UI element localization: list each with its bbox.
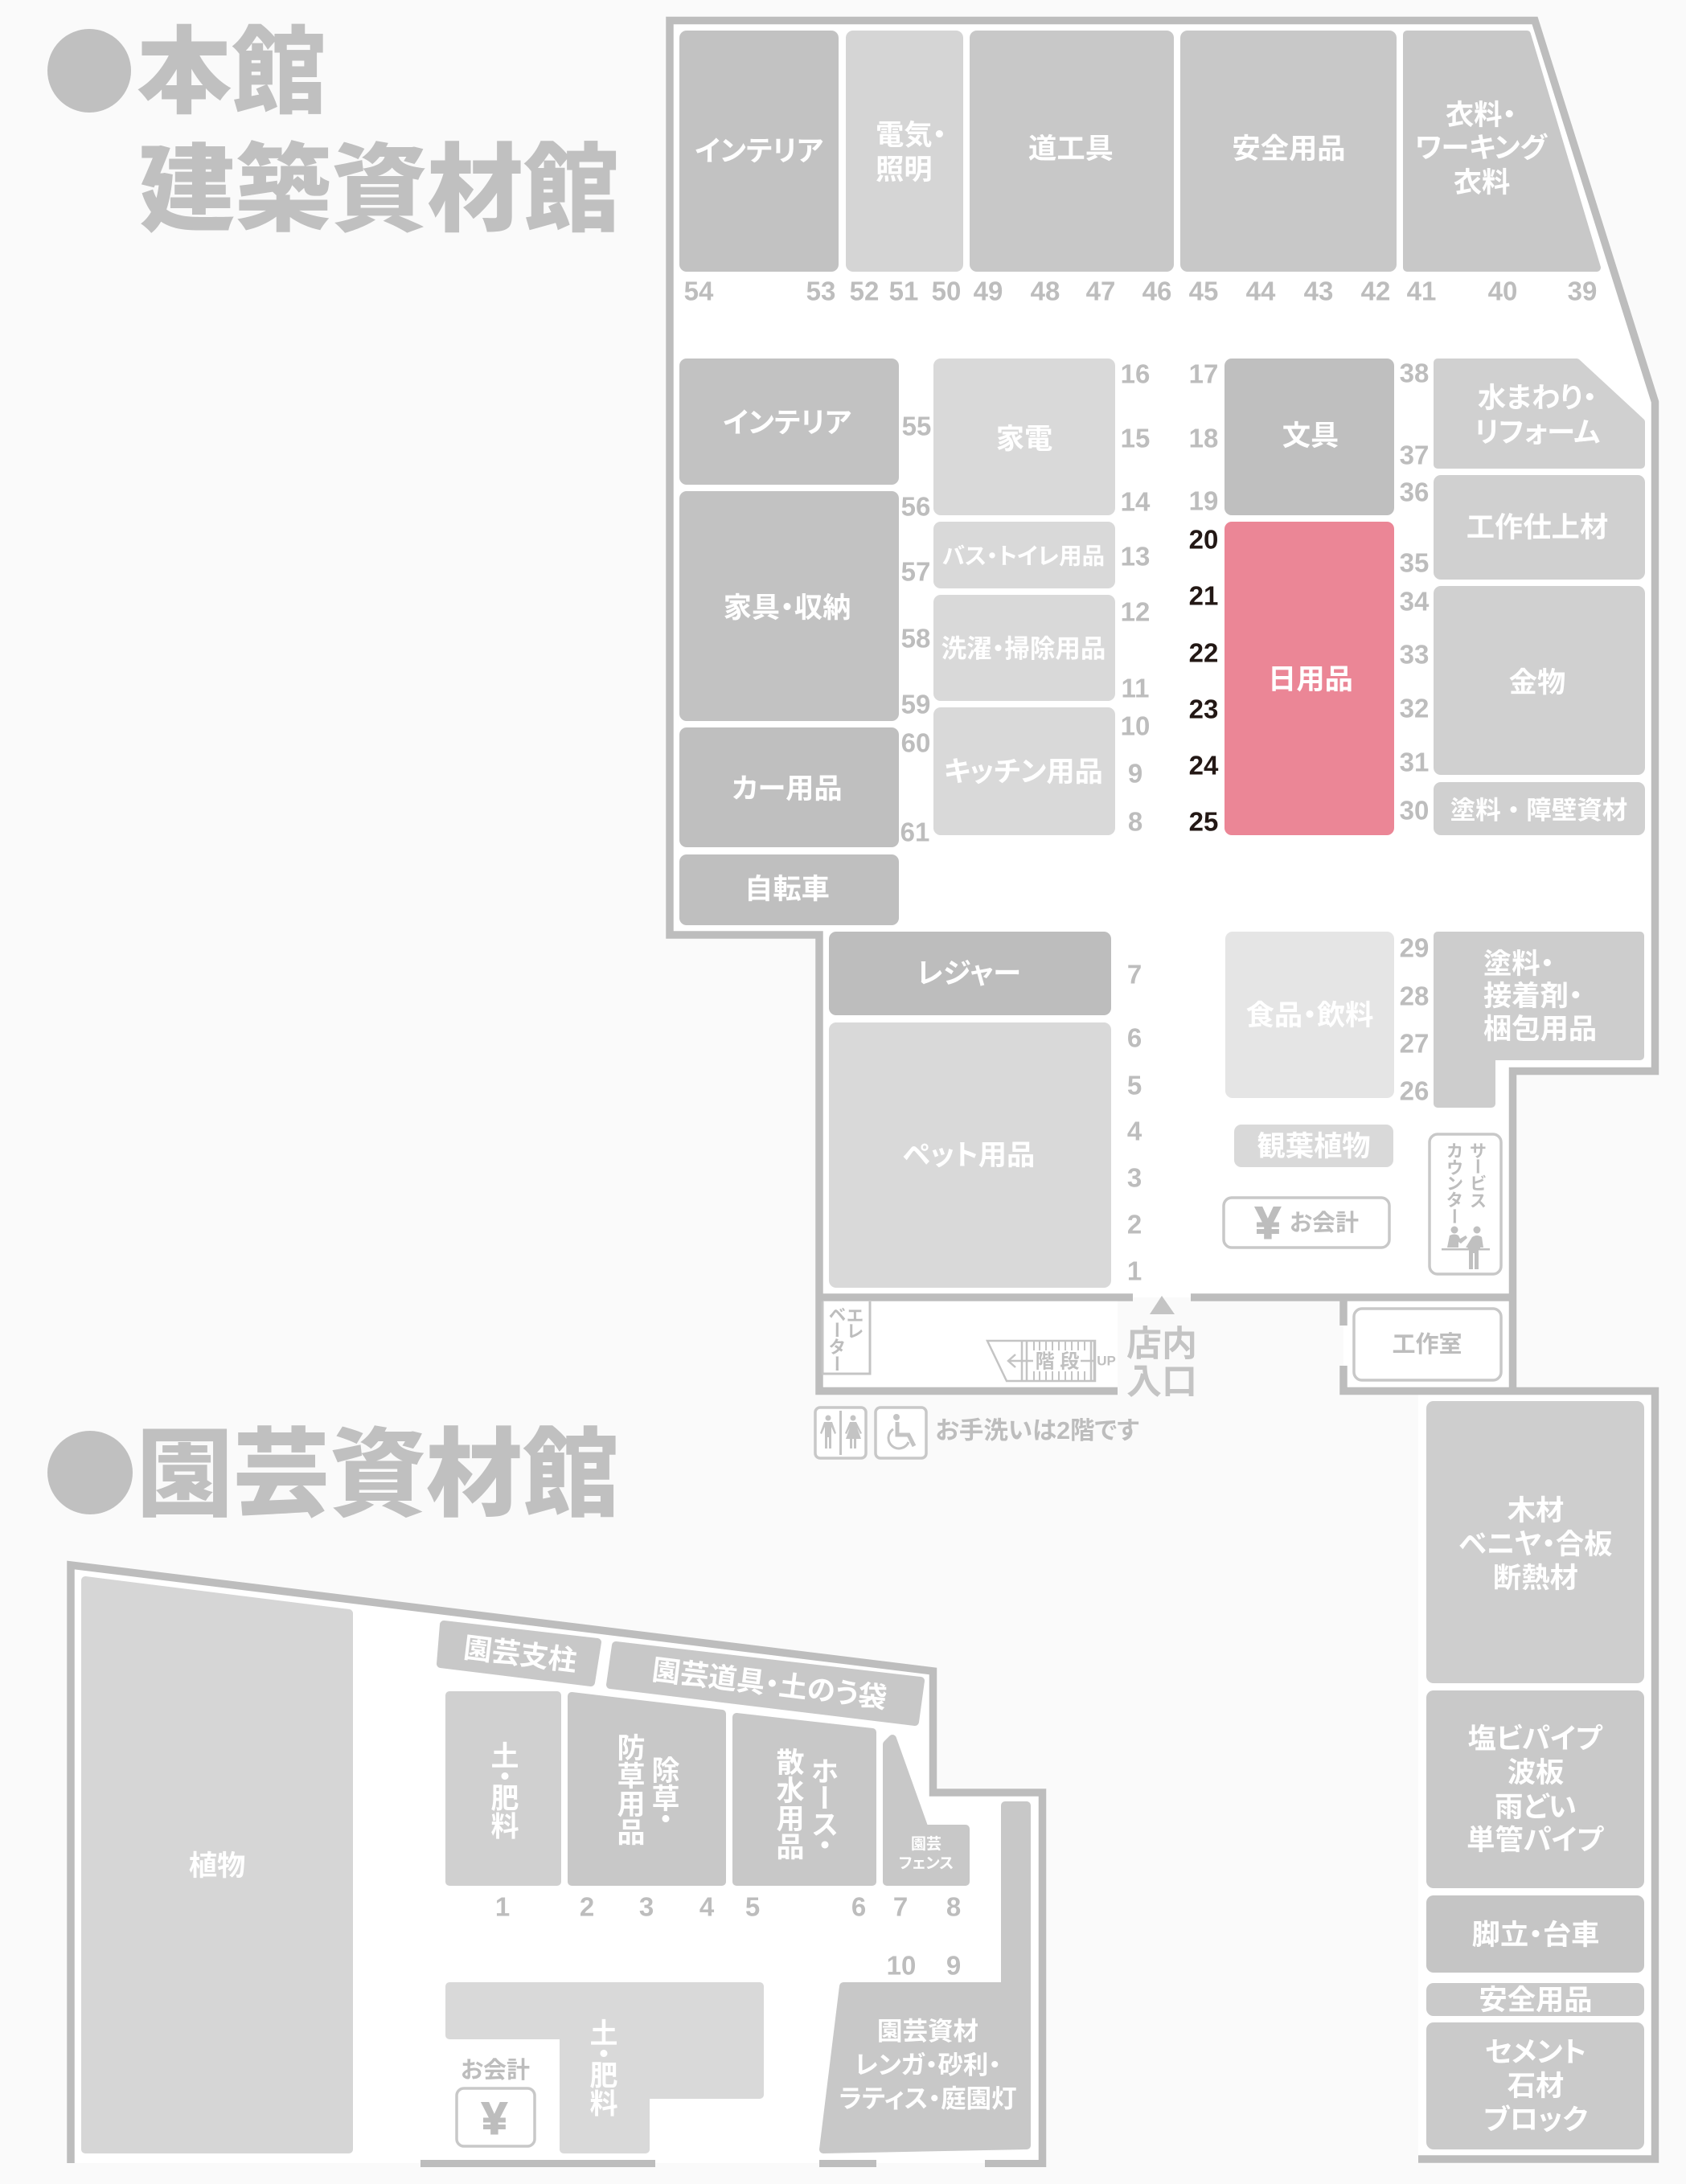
section: 洗濯・掃除用品: [933, 595, 1115, 701]
section: 電気・照明: 電気・: [876, 120, 946, 151]
section: インテリア top: [679, 31, 839, 272]
aisle numbers: centre columns: 17: [1189, 359, 1218, 389]
section: 除草・防草用品: 防草用品: [613, 1733, 645, 1846]
section: 塩ビパイプ: [1426, 1690, 1644, 1888]
aisle numbers: top row: 53: [806, 277, 835, 305]
room: 工作室: 工作室: [1392, 1331, 1462, 1358]
section: 家電: 家電: [996, 424, 1052, 455]
aisle numbers: top row: 47: [1086, 277, 1115, 305]
section: 塩ビパイプ: 塩ビパイプ: [1468, 1723, 1603, 1755]
aisle numbers: centre columns: 37: [1400, 440, 1429, 469]
aisle numbers: centre columns: 59: [901, 690, 930, 719]
aisle numbers: centre columns: 61: [900, 817, 929, 847]
section: 工作仕上材: [1434, 475, 1645, 580]
aisle numbers: highlighted 20-25: 23: [1189, 695, 1218, 723]
aisle numbers: centre columns: 11: [1122, 674, 1149, 703]
garden register: ¥: [482, 2093, 507, 2143]
aisle numbers: centre columns: 15: [1121, 423, 1150, 453]
icon: accessible restroom: [876, 1408, 926, 1458]
aisle numbers: highlighted 20-25: 20: [1189, 524, 1218, 555]
section: レジャー: [829, 932, 1111, 1015]
section: 水まわり・リフォーム: リフォーム: [1475, 417, 1600, 449]
service counter: サービス: [1467, 1142, 1487, 1209]
section: セメント: 石材: [1508, 2071, 1564, 2102]
entrance: [1126, 1296, 1197, 1402]
section: レジャー: レジャー: [917, 958, 1021, 990]
section: 金物: [1434, 586, 1645, 775]
section: 電気・照明: 照明: [876, 154, 933, 186]
section: 園芸道具・土のう袋: 園芸道具・土のう袋: [650, 1654, 888, 1715]
section: インテリア: インテリア: [723, 408, 851, 439]
aisle numbers: top row: 54: [684, 277, 714, 305]
aisle numbers: top row: [684, 277, 1597, 305]
section: 園芸資材: ラティス・庭園灯: [839, 2084, 1017, 2112]
section: 塩ビパイプ: 波板: [1508, 1757, 1564, 1789]
aisle numbers: top row: 44: [1246, 277, 1276, 305]
heading: main building: 建築資材館: [139, 137, 619, 244]
aisle numbers: garden: 2: [580, 1892, 594, 1921]
section: 園芸道具・土のう袋: [610, 1645, 921, 1722]
aisle numbers: top row: 41: [1407, 277, 1436, 305]
section: 塩ビパイプ: 雨どい: [1495, 1792, 1577, 1823]
floor plan: garden building: [71, 1565, 1046, 2167]
register: お会計: ¥: [1255, 1198, 1281, 1248]
aisle numbers: centre columns: 9: [1128, 759, 1142, 788]
aisle numbers: garden: [495, 1892, 961, 1981]
section: 食品・飲料: 食品・飲料: [1246, 1000, 1373, 1031]
icon: counter staff and customer: [1442, 1227, 1490, 1269]
garden register: [457, 2057, 535, 2146]
section: カー用品: [679, 727, 899, 847]
aisle numbers: centre columns: 38: [1400, 359, 1429, 387]
stairs: 階 段: [1036, 1350, 1079, 1373]
section: 衣料・ワーキング衣料: [1407, 35, 1597, 268]
aisle numbers: centre columns: 57: [901, 556, 930, 587]
section: バス・トイレ用品: バス・トイレ用品: [942, 543, 1105, 569]
elevator: [822, 1301, 870, 1374]
aisle numbers: top row: 42: [1361, 277, 1390, 305]
section: 安全用品 lower: 安全用品: [1479, 1985, 1593, 2016]
section: 家電: [933, 359, 1115, 515]
service counter: カウンター: [1444, 1142, 1463, 1224]
register: お会計: [1224, 1198, 1389, 1248]
aisle numbers: centre columns: 36: [1400, 477, 1429, 506]
section: 土・肥料: 土・肥料: [487, 1741, 519, 1839]
aisle numbers: centre columns: 8: [1128, 807, 1142, 836]
section: キッチン用品: キッチン用品: [944, 756, 1103, 788]
section: 衣料・ワーキング衣料: 衣料・: [1446, 100, 1516, 131]
section: 文具: 文具: [1282, 420, 1339, 452]
section: 自転車: [679, 854, 899, 925]
garden register: お会計: [461, 2057, 530, 2084]
section: 塗料・障壁資材: 塗料・障壁資材: [1450, 796, 1627, 825]
aisle numbers: garden: 9: [946, 1950, 961, 1981]
aisle numbers: centre columns: 32: [1400, 693, 1429, 723]
section: 脚立・台車: [1426, 1895, 1644, 1973]
aisle numbers: centre columns: 12: [1121, 596, 1150, 627]
section: 土・肥料 lower: 土・肥料: [585, 2018, 617, 2117]
floor plan: main building: [670, 20, 1655, 2159]
bottom wall segments: [420, 2160, 1046, 2167]
aisle numbers: centre columns: 34: [1400, 587, 1430, 616]
section: 塗料・接着剤・梱包用品: 梱包用品: [1483, 1014, 1597, 1045]
section: 電気・照明: [846, 31, 963, 272]
aisle numbers: top row: 40: [1488, 277, 1517, 305]
section: 自転車: 自転車: [745, 874, 830, 905]
section: 日用品 (highlighted): [1225, 522, 1394, 835]
section: 観葉植物: [1234, 1125, 1393, 1167]
section: 園芸フェンス: [887, 1739, 966, 1882]
section: 植物: [85, 1580, 349, 2149]
elevator: ベーター: [827, 1307, 846, 1372]
section: 観葉植物: 観葉植物: [1257, 1131, 1371, 1162]
section: 除草・防草用品: [572, 1696, 722, 1882]
section: 水まわり・リフォーム: 水まわり・: [1478, 383, 1597, 414]
entrance: 店内: [1126, 1325, 1197, 1363]
aisle numbers: garden: 1: [495, 1892, 510, 1921]
section: セメント: ブロック: [1483, 2104, 1588, 2136]
section: 塗料・接着剤・梱包用品: 接着剤・: [1483, 981, 1583, 1012]
section: ペット用品: [829, 1022, 1111, 1288]
section: 木材: ベニヤ・合板: [1458, 1529, 1613, 1560]
entrance: 入口: [1126, 1362, 1197, 1402]
aisle numbers: centre columns: [900, 359, 1430, 1286]
section: ペット用品: ペット用品: [903, 1140, 1035, 1171]
section: 文具: [1225, 359, 1394, 515]
section: 安全用品 lower: [1426, 1983, 1644, 2016]
aisle numbers: centre columns: 7: [1127, 960, 1142, 989]
section: 脚立・台車: 脚立・台車: [1472, 1920, 1599, 1951]
aisle numbers: centre columns: 19: [1189, 486, 1218, 516]
section: 安全用品: [1180, 31, 1397, 272]
service counter: [1430, 1134, 1501, 1274]
heading: main building: 本館: [137, 20, 326, 126]
aisle numbers: garden: 7: [893, 1892, 908, 1921]
section: 食品・飲料: [1225, 932, 1394, 1098]
section: 木材: 木材: [1508, 1495, 1564, 1526]
section: 安全用品: 安全用品: [1232, 133, 1346, 165]
section: 園芸フェンス: 園芸: [911, 1835, 941, 1853]
aisle numbers: garden: 4: [699, 1892, 715, 1921]
aisle numbers: garden: 3: [639, 1892, 654, 1921]
aisle numbers: centre columns: 28: [1400, 981, 1429, 1011]
aisle numbers: centre columns: 60: [901, 728, 930, 757]
section: 除草・防草用品: 除草・: [648, 1756, 679, 1826]
section: ホース・散水用品: ホース・: [807, 1758, 838, 1852]
room: 工作室: [1354, 1309, 1501, 1380]
aisle numbers: top row: 48: [1031, 277, 1060, 305]
note: restrooms on 2F: お手洗いは2階です: [935, 1417, 1139, 1444]
section: 衣料・ワーキング衣料: ワーキング: [1415, 133, 1548, 164]
section: 木材: 断熱材: [1493, 1563, 1578, 1594]
aisle numbers: centre columns: 2: [1127, 1209, 1142, 1240]
section: 道工具: 道工具: [1028, 133, 1114, 165]
aisle numbers: highlighted 20-25: [1189, 524, 1219, 836]
stairs: UP: [1097, 1354, 1116, 1368]
section: ホース・散水用品: [736, 1717, 872, 1882]
section: ホース・散水用品: 散水用品: [772, 1748, 804, 1860]
aisle numbers: top row: 50: [932, 277, 961, 305]
section: 洗濯・掃除用品: 洗濯・掃除用品: [941, 633, 1106, 662]
aisle numbers: garden: 5: [745, 1892, 760, 1921]
aisle numbers: top row: 46: [1142, 277, 1171, 305]
section: 木材: [1426, 1401, 1644, 1683]
section: セメント: セメント: [1485, 2037, 1586, 2068]
register: お会計: お会計: [1290, 1210, 1359, 1236]
aisle numbers: centre columns: 55: [902, 412, 931, 440]
section: 金物: 金物: [1509, 667, 1565, 699]
section: 園芸支柱: 園芸支柱: [462, 1633, 578, 1678]
section: 園芸資材: レンガ・砂利・: [855, 2050, 1001, 2079]
section: 家具・収納: 家具・収納: [724, 592, 851, 624]
section: 日用品 (highlighted): 日用品: [1268, 664, 1353, 695]
section: 塗料・接着剤・梱包用品: 塗料・: [1483, 949, 1554, 980]
aisle numbers: top row: 39: [1568, 277, 1597, 305]
section: インテリア top: インテリア: [695, 136, 823, 167]
aisle numbers: highlighted 20-25: 22: [1189, 638, 1218, 667]
aisle numbers: centre columns: 31: [1400, 748, 1429, 776]
section: バス・トイレ用品: [933, 522, 1115, 588]
aisle numbers: centre columns: 6: [1127, 1022, 1142, 1053]
aisle numbers: highlighted 20-25: 24: [1189, 751, 1219, 780]
section: インテリア: [679, 359, 899, 485]
aisle numbers: highlighted 20-25: 21: [1189, 580, 1218, 611]
aisle numbers: garden: 6: [851, 1892, 866, 1921]
aisle numbers: centre columns: 56: [901, 492, 930, 521]
aisle numbers: centre columns: 3: [1127, 1162, 1142, 1193]
section: 園芸資材: 園芸資材: [877, 2016, 978, 2045]
aisle numbers: highlighted 20-25: 25: [1189, 807, 1218, 836]
section: 家具・収納: [679, 491, 899, 721]
aisle numbers: centre columns: 10: [1121, 711, 1150, 741]
heading: main building: [47, 20, 619, 244]
aisle numbers: centre columns: 5: [1127, 1071, 1142, 1100]
section: 土・肥料: [449, 1695, 557, 1882]
aisle numbers: top row: 43: [1304, 277, 1333, 305]
section: 衣料・ワーキング衣料: 衣料: [1454, 167, 1510, 199]
aisle numbers: top row: 49: [974, 277, 1003, 305]
section: 園芸資材: [823, 1805, 1027, 2149]
aisle numbers: centre columns: 29: [1400, 932, 1429, 963]
aisle numbers: centre columns: 14: [1121, 487, 1151, 516]
aisle numbers: centre columns: 30: [1400, 796, 1429, 825]
section: 工作仕上材: 工作仕上材: [1467, 512, 1608, 543]
aisle numbers: centre columns: 18: [1189, 423, 1218, 453]
section: 塗料・接着剤・梱包用品: [1438, 936, 1640, 1104]
aisle numbers: centre columns: 26: [1400, 1076, 1429, 1106]
section: 園芸フェンス: フェンス: [899, 1855, 954, 1872]
section: 土・肥料 lower: [449, 1986, 760, 2149]
section: 道工具: [970, 31, 1174, 272]
aisle numbers: garden: 8: [946, 1892, 961, 1921]
section: 塩ビパイプ: 単管パイプ: [1467, 1825, 1604, 1856]
section: 塗料・障壁資材: [1434, 782, 1645, 835]
section: 水まわり・リフォーム: [1438, 363, 1641, 465]
section: キッチン用品: [933, 707, 1115, 835]
section: カー用品: カー用品: [732, 773, 843, 805]
aisle numbers: garden: 10: [887, 1950, 916, 1981]
aisle numbers: centre columns: 35: [1400, 548, 1429, 577]
elevator: エレ: [844, 1307, 864, 1339]
heading: garden building: 園芸資材館: [137, 1421, 619, 1529]
section: セメント: [1426, 2022, 1644, 2149]
aisle numbers: top row: 45: [1189, 277, 1218, 305]
section: 植物: 植物: [189, 1850, 245, 1882]
aisle numbers: centre columns: 13: [1121, 542, 1150, 571]
aisle numbers: centre columns: 58: [901, 624, 930, 653]
aisle numbers: top row: 51: [889, 277, 918, 305]
section: 園芸支柱: [441, 1625, 597, 1682]
aisle numbers: centre columns: 27: [1400, 1029, 1429, 1058]
icon: restrooms: [815, 1408, 866, 1458]
aisle numbers: centre columns: 4: [1127, 1116, 1142, 1146]
aisle numbers: centre columns: 1: [1127, 1256, 1142, 1286]
aisle numbers: centre columns: 16: [1121, 359, 1150, 389]
stairs: [987, 1341, 1116, 1381]
aisle numbers: top row: 52: [850, 277, 879, 305]
aisle numbers: centre columns: 33: [1400, 640, 1429, 669]
